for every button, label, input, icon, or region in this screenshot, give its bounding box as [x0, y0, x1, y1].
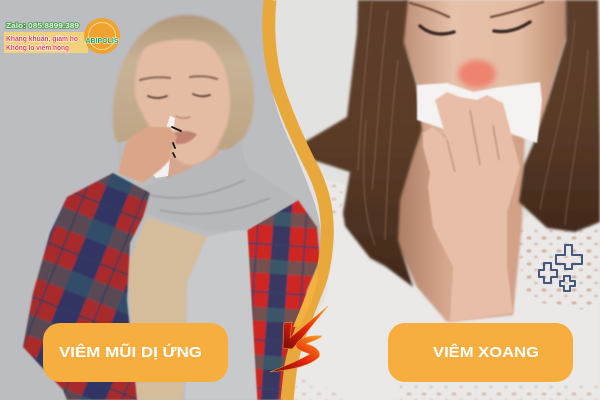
dark long hair right: [519, 0, 600, 232]
slogan banner: Không lo viêm họng: [6, 45, 69, 52]
letter V: [283, 306, 328, 349]
red nose glow: [458, 60, 496, 88]
lace details on blouse: [292, 180, 600, 400]
eyebrows and eyes: [410, 2, 543, 34]
tissue: [417, 82, 542, 143]
left background: [0, 0, 340, 400]
icon: medical crosses: [539, 245, 582, 291]
blonde hair: [113, 15, 254, 150]
eyebrows, closed eyes, nose, mouth: [140, 76, 217, 118]
chest skin: [395, 130, 525, 322]
slogan banner: [4, 32, 88, 53]
raised hand: [118, 127, 177, 183]
phone number: Zalo: 085.8899.389: [6, 21, 79, 30]
slogan banner: Kháng khuẩn, giảm ho: [6, 35, 78, 43]
hair falling over chest: [127, 217, 207, 400]
face: [403, 0, 568, 135]
white lace blouse: [285, 140, 600, 400]
VS mark: [270, 267, 328, 372]
jacket right side plaid: [247, 200, 320, 400]
right background: [265, 0, 600, 400]
neck: [165, 150, 222, 190]
face: [135, 40, 230, 165]
curved golden divider: [269, 0, 327, 400]
scarf wrap: [143, 140, 298, 232]
letter S: [270, 336, 322, 372]
scarf behind hand: [117, 140, 128, 172]
logo badge: ABIPOLIS: [86, 36, 118, 45]
gold brush stroke: [293, 267, 318, 327]
hand and forearm: [423, 92, 520, 322]
jacket sleeve and body plaid: [23, 173, 150, 400]
grey backdrop left of the curve: [0, 0, 321, 400]
right photo: woman blowing nose: [265, 0, 600, 400]
nasal spray bottle: [150, 116, 175, 178]
label pill: sinusitis: [388, 323, 573, 382]
label pill: sinusitis: VIÊM XOANG: [433, 343, 539, 361]
label pill: allergic rhinitis: VIÊM MŨI DỊ ỨNG: [59, 343, 202, 361]
dark long hair left: [303, 0, 422, 287]
brand header: [4, 18, 120, 54]
label pill: allergic rhinitis: [43, 323, 228, 382]
scarf hanging: [185, 227, 257, 400]
left photo: woman with scarf using nasal spray: [0, 0, 321, 400]
black nails: [172, 127, 181, 157]
